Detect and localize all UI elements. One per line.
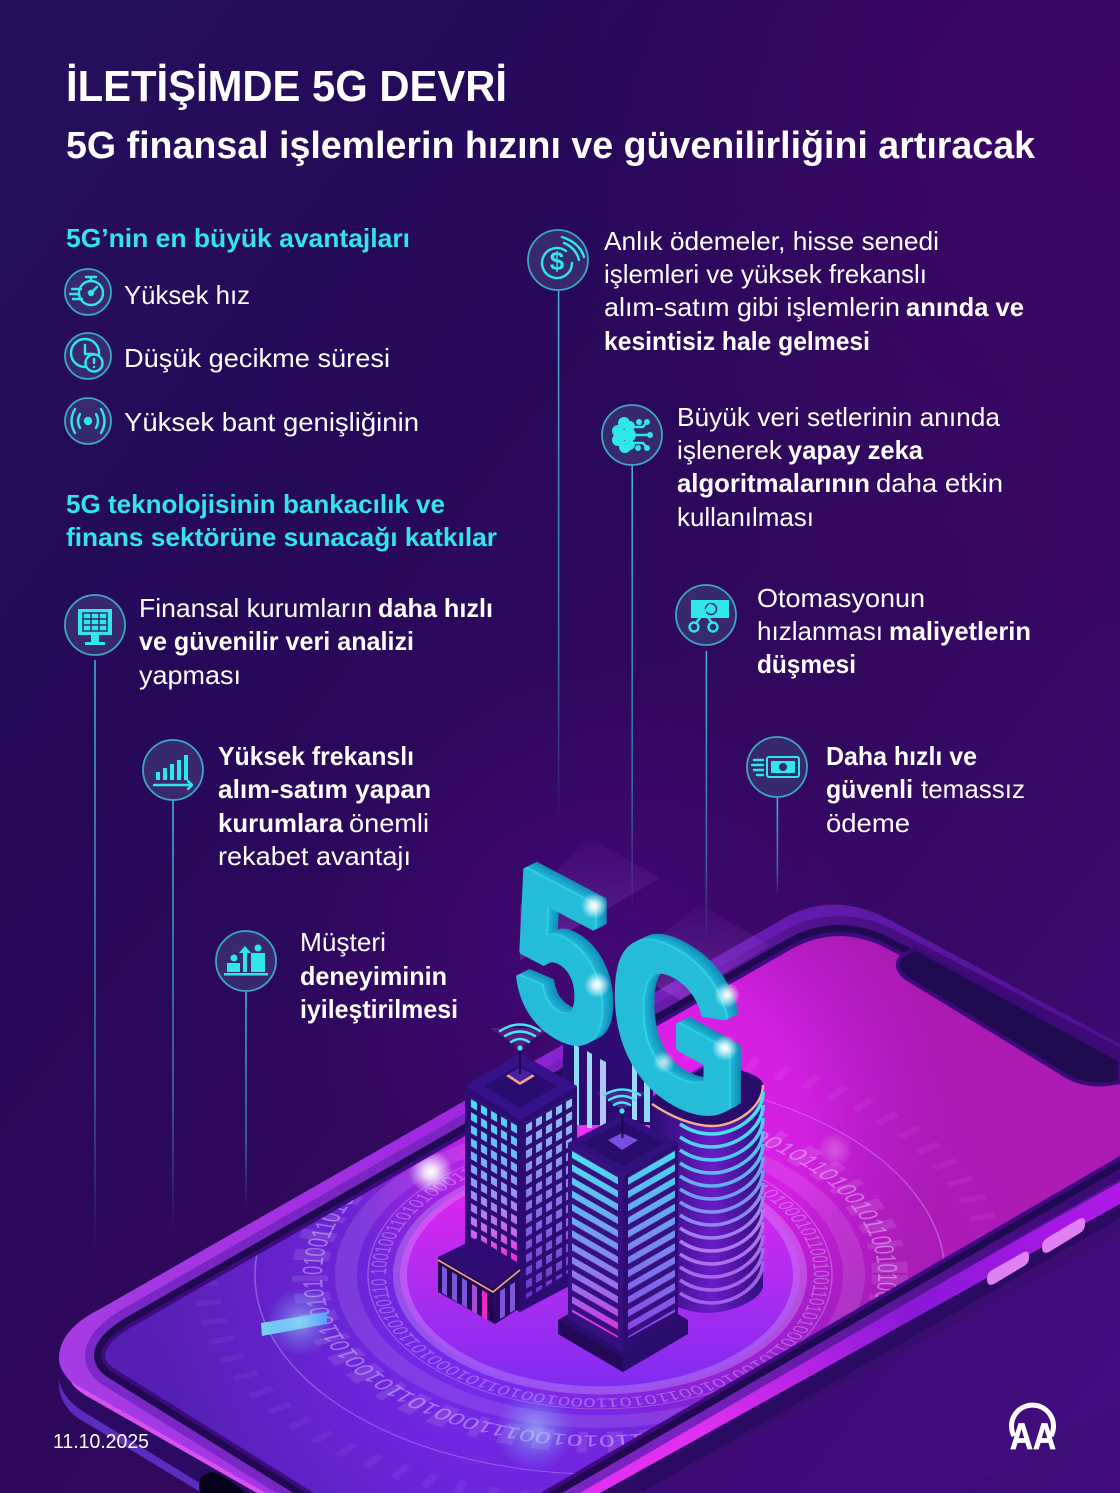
icon: bars [143, 740, 203, 800]
heading: finance contributions [66, 489, 497, 552]
heading: finance contributions: finans sektörüne sunacağı katkılar [66, 522, 497, 552]
icon: clock alert [65, 333, 111, 379]
label: high bandwidth: Yüksek bant genişliğinin [124, 407, 419, 437]
tower: left building [465, 1024, 577, 1312]
digit 5: 5 [517, 817, 608, 1104]
phone outer frame [59, 905, 1120, 1493]
text: data analysis: daha hızlı [378, 593, 493, 623]
letter G: G [614, 870, 741, 1180]
letter G: G [616, 869, 743, 1179]
text: customer experience: Müşteri [300, 927, 386, 957]
text: automation: maliyetlerin [889, 616, 1031, 646]
panel: automation [676, 583, 1035, 679]
icon: scissors and ticket [676, 585, 736, 645]
text: high frequency trading: önemli [349, 808, 429, 838]
tower: back building [563, 1010, 653, 1130]
letter G: G [620, 867, 747, 1177]
text: instant payments: işlemleri ve yüksek frekanslı [604, 259, 927, 289]
icon: banknote [747, 737, 807, 797]
panel: advantages [65, 223, 419, 444]
phone illustration [58, 904, 1120, 1493]
letter G: G [618, 868, 745, 1178]
icon: people and arrow [216, 931, 276, 991]
icon: monitor [65, 595, 125, 655]
text: instant payments: alım-satım gibi işlemlerin [604, 292, 900, 322]
text: automation: düşmesi [757, 649, 856, 679]
text: big data and AI: daha etkin [876, 468, 1003, 498]
text: high frequency trading: kurumlara [218, 808, 344, 838]
roof antenna and signal [596, 1090, 648, 1150]
digit 5: 5 [513, 819, 604, 1106]
phone side lower accent [59, 1380, 216, 1493]
panel: customer experience [216, 927, 458, 1024]
cylinder stripes [680, 1092, 763, 1303]
text: contactless payment: güvenli [826, 774, 913, 804]
phone port [199, 1472, 246, 1493]
roof antenna and signal [490, 1024, 550, 1085]
side buttons [987, 1218, 1085, 1285]
letter G: G [612, 871, 739, 1181]
icon: dollar signal: $ [550, 246, 565, 276]
text: big data and AI: işlenerek [677, 435, 783, 465]
connector lines [94, 290, 778, 1250]
screen artwork [194, 938, 996, 1493]
text: instant payments: Anlık ödemeler, hisse senedi [604, 226, 939, 256]
text: big data and AI: yapay zeka [788, 435, 924, 465]
text: big data and AI: algoritmalarının [677, 468, 870, 498]
subtitle: 5G finansal işlemlerin hızını ve güvenilirliğini artıracak [66, 125, 1036, 167]
phone screen [105, 936, 1120, 1493]
text: instant payments: kesintisiz hale gelmesi [604, 326, 870, 356]
text: high frequency trading: rekabet avantajı [218, 841, 411, 871]
text: high frequency trading: Yüksek frekanslı [218, 741, 414, 771]
outer binary ring: 0100110101100011101000101001101010011100010110100101100101001101011000111010001010011010100111000101101001011001010011010110001110100010100110101001110001011010 [302, 1110, 898, 1447]
digit 5: 5 [521, 815, 612, 1102]
digit 5: 5 [525, 813, 616, 1100]
notch [898, 948, 1120, 1084]
title: İLETİŞİMDE 5G DEVRİ [66, 62, 507, 111]
panel: big data and AI [602, 402, 1007, 532]
text: contactless payment: Daha hızlı ve [826, 741, 977, 771]
panel: contactless payment [747, 737, 1029, 838]
text: customer experience: iyileştirilmesi [300, 994, 458, 1024]
digit 5: 5 [523, 814, 614, 1101]
text: big data and AI: Büyük veri setlerinin anında [677, 402, 1001, 432]
text: data analysis: ve güvenilir veri analizi [139, 626, 414, 656]
text: high frequency trading: alım-satım yapan [218, 774, 431, 804]
text: contactless payment: temassız [921, 774, 1025, 804]
icon: signal [65, 398, 111, 444]
logo: AA [1010, 1405, 1056, 1457]
5G backdrop planes [520, 838, 770, 1000]
phone lower edge highlight [576, 1182, 1120, 1493]
text: automation: Otomasyonun [757, 583, 925, 613]
label: low latency: Düşük gecikme süresi [124, 343, 390, 373]
icon: brain circuit [602, 405, 662, 465]
label: high speed: Yüksek hız [124, 280, 250, 310]
panel: instant payments [528, 226, 1028, 356]
digit 5: 5 [515, 818, 606, 1105]
tower: round building [650, 1060, 763, 1313]
text: contactless payment: ödeme [826, 808, 910, 838]
5G 3D lettering [513, 813, 749, 1182]
icon: stopwatch [65, 269, 111, 315]
concentric rings and binary [194, 1042, 996, 1493]
panel: high frequency trading [143, 740, 435, 871]
heading: advantages: 5G’nin en büyük avantajları [66, 223, 410, 253]
phone inner bezels [105, 936, 1120, 1493]
text: big data and AI: kullanılması [677, 502, 814, 532]
text: instant payments: anında ve [906, 292, 1024, 322]
inner binary ring: 100100110101000110100101001101011000100101101000101100100110101000110100101001101011000100101101000101100100110101000110100101001 [370, 1151, 830, 1408]
letter G: G [622, 866, 749, 1176]
date: 11.10.2025 [53, 1431, 149, 1453]
phone side [59, 1190, 1120, 1493]
digit 5: 5 [519, 816, 610, 1103]
tower: front building [558, 1090, 688, 1372]
logo: AA: AA [1010, 1416, 1056, 1457]
text: data analysis: yapması [139, 660, 241, 690]
text: automation: hızlanması [757, 616, 883, 646]
text: customer experience: deneyiminin [300, 961, 447, 991]
icon: dollar signal [528, 230, 588, 290]
letter highlights [581, 893, 740, 1073]
letter G: G [610, 872, 737, 1182]
panel: data analysis [65, 593, 497, 690]
heading: finance contributions: 5G teknolojisinin bankacılık ve [66, 489, 445, 519]
glowing bars [261, 1312, 327, 1336]
text: data analysis: Finansal kurumların [139, 593, 372, 623]
tower: annex [438, 1238, 520, 1324]
